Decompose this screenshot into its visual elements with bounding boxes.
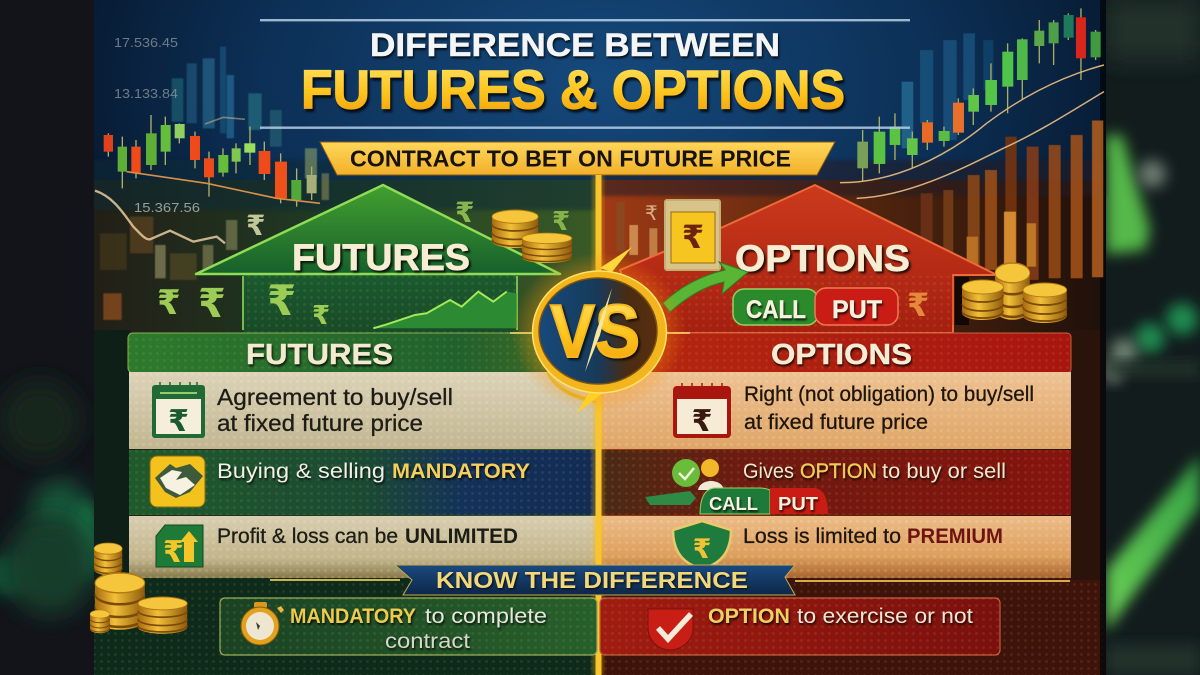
row call and put pills: CALL bbox=[709, 494, 758, 514]
rupee symbols: futures side: ₹ bbox=[198, 281, 226, 327]
futures row 3: Profit & loss can be bbox=[217, 525, 398, 548]
left price labels bbox=[114, 35, 200, 215]
icon: rupee calendar green: ₹ bbox=[168, 404, 189, 439]
left price lines bbox=[95, 117, 320, 243]
futures row 1: at fixed future price bbox=[217, 410, 423, 436]
options row 3 bbox=[600, 516, 1071, 578]
call and put pills: PUT bbox=[832, 296, 882, 324]
options row 1: at fixed future price bbox=[744, 410, 928, 434]
panel: options takeaway: to exercise or not bbox=[797, 605, 973, 628]
rupee symbols: futures side: ₹ bbox=[267, 276, 296, 325]
know the difference ribbon bbox=[395, 565, 795, 595]
icon: stopwatch bbox=[241, 602, 284, 645]
right trend lines bbox=[840, 65, 1104, 198]
icon: handshake bbox=[150, 456, 205, 507]
coins: options bbox=[962, 263, 1067, 323]
panel: futures takeaway: MANDATORY bbox=[290, 605, 416, 628]
call and put pills: CALL bbox=[746, 296, 806, 324]
row call and put pills bbox=[700, 488, 828, 514]
options house: OPTIONS bbox=[735, 238, 910, 279]
rupee symbols: futures side: ₹ bbox=[552, 207, 570, 237]
icon: profit rupee: ₹ bbox=[163, 535, 184, 570]
icon: rupee calendar green bbox=[152, 382, 205, 439]
icon: profit rupee bbox=[156, 525, 203, 570]
futures house bbox=[196, 185, 560, 334]
panel: options takeaway: OPTION bbox=[708, 605, 790, 628]
arrow: green to options bbox=[663, 262, 748, 312]
futures row 3: UNLIMITED bbox=[405, 525, 518, 548]
left price labels: 15.367.56 bbox=[134, 200, 200, 215]
rupee symbols: futures side: ₹ bbox=[455, 196, 474, 229]
options row 1 bbox=[600, 372, 1071, 449]
panel: options bbox=[600, 333, 1071, 578]
options house bbox=[620, 185, 997, 334]
title: FUTURES & OPTIONS bbox=[301, 58, 845, 120]
left background bars bbox=[100, 47, 329, 320]
panel: options takeaway bbox=[600, 598, 1000, 655]
title bbox=[301, 27, 845, 120]
coins: bottom left bbox=[90, 543, 187, 634]
know the difference ribbon: KNOW THE DIFFERENCE bbox=[436, 567, 748, 593]
icon: red shield check bbox=[648, 609, 693, 650]
left price labels: 17.536.45 bbox=[114, 35, 178, 50]
rupee symbols: futures side bbox=[157, 196, 570, 331]
left price labels: 13.133.84 bbox=[114, 86, 178, 101]
futures row 1 bbox=[129, 372, 597, 449]
panel: futures takeaway: contract bbox=[385, 630, 470, 653]
options row 3: PREMIUM bbox=[907, 525, 1003, 548]
rupee symbols: futures side: ₹ bbox=[246, 209, 265, 242]
vs badge bbox=[510, 247, 690, 414]
bottom gold rules bbox=[270, 579, 1070, 582]
rupee symbols: options side: ₹ bbox=[907, 286, 929, 324]
futures house: FUTURES bbox=[292, 237, 470, 278]
panel: futures bbox=[128, 333, 598, 578]
title rules bbox=[260, 19, 910, 129]
futures row 3 bbox=[129, 516, 597, 578]
options row 3: Loss is limited to bbox=[743, 525, 901, 548]
call and put pills bbox=[733, 288, 898, 325]
left candlestick chart bbox=[104, 115, 317, 207]
options header bbox=[600, 333, 1071, 373]
options row 2: to buy or sell bbox=[882, 460, 1006, 483]
icon: rupee contract card bbox=[665, 200, 720, 270]
right background bars bbox=[617, 33, 1103, 280]
right side blurred candles bbox=[1104, 135, 1200, 675]
left side blurred glow bbox=[0, 380, 101, 615]
rupee symbols: options side bbox=[645, 201, 929, 324]
futures mini chart bbox=[373, 292, 517, 328]
options header: OPTIONS bbox=[771, 339, 912, 371]
vs badge: VS bbox=[550, 289, 640, 373]
subtitle banner bbox=[320, 142, 835, 175]
gold centre divider bbox=[592, 175, 604, 675]
title: DIFFERENCE BETWEEN bbox=[370, 27, 780, 63]
options row 1: Right (not obligation) to buy/sell bbox=[744, 382, 1034, 406]
icon: rupee calendar red bbox=[673, 383, 731, 439]
coins: futures top bbox=[492, 210, 572, 263]
futures row 1: Agreement to buy/sell bbox=[217, 384, 453, 410]
subtitle banner: CONTRACT TO BET ON FUTURE PRICE bbox=[350, 146, 791, 172]
icon: rupee shield: ₹ bbox=[693, 534, 711, 565]
rupee symbols: options side: ₹ bbox=[645, 201, 658, 225]
options row 2: Gives bbox=[743, 460, 794, 483]
futures row 2: MANDATORY bbox=[392, 460, 530, 483]
options row 2: OPTION bbox=[800, 460, 877, 483]
icon: rupee contract card: ₹ bbox=[682, 218, 704, 256]
icon: rupee calendar red: ₹ bbox=[692, 404, 712, 439]
futures header bbox=[128, 333, 598, 373]
icon: rupee shield bbox=[673, 521, 731, 566]
panel: futures takeaway: to complete bbox=[425, 605, 547, 628]
futures row 2 bbox=[129, 450, 597, 515]
options row 2 bbox=[600, 450, 1071, 515]
rupee symbols: futures side: ₹ bbox=[312, 301, 330, 331]
panel: futures takeaway bbox=[220, 598, 597, 655]
rupee symbols: futures side: ₹ bbox=[157, 283, 181, 323]
icon: people and check bbox=[645, 459, 724, 505]
futures header: FUTURES bbox=[246, 339, 393, 371]
row call and put pills: PUT bbox=[778, 494, 818, 514]
right candlestick chart bbox=[857, 8, 1101, 182]
futures row 2: Buying & selling bbox=[217, 460, 385, 483]
